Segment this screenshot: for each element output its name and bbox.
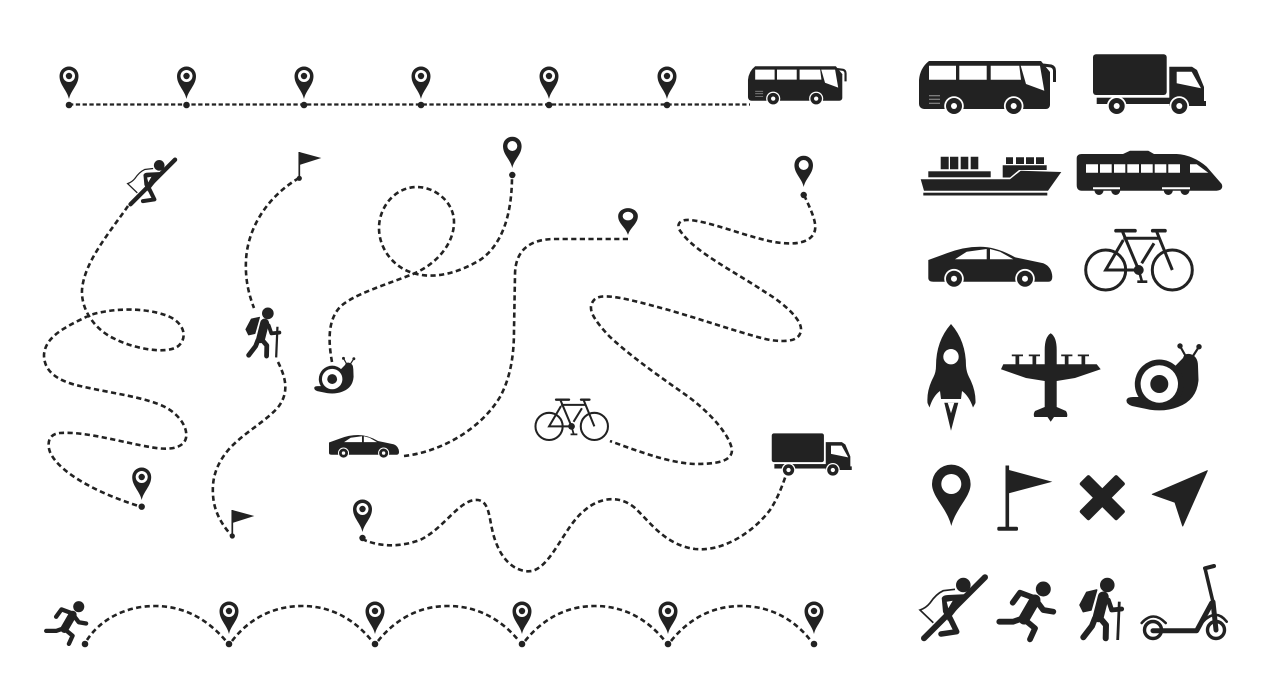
icon: snail xyxy=(1126,343,1202,410)
icon: flag xyxy=(997,466,1052,531)
route: bottom arcs with runner and pins xyxy=(46,601,824,647)
location pins xyxy=(60,66,676,99)
icon: hiker xyxy=(1080,578,1122,640)
icon: car xyxy=(928,247,1052,289)
icon: small bicycle xyxy=(535,400,608,440)
icon: small bus xyxy=(748,66,846,106)
icon: cargo ship xyxy=(921,157,1061,196)
icon: bicycle xyxy=(1086,231,1192,290)
stop markers xyxy=(66,102,670,108)
icon: truck xyxy=(1093,54,1206,116)
icon: top flag xyxy=(297,152,321,181)
icon: kick scooter xyxy=(1142,566,1227,638)
icon: small hiker xyxy=(246,308,279,357)
icon: loop end pin xyxy=(503,137,522,178)
route: superhero winding path to pin xyxy=(44,160,186,510)
icon: small snail xyxy=(314,357,355,393)
route: car to pin xyxy=(329,208,638,459)
location pins xyxy=(220,602,824,634)
icon: end pin xyxy=(132,468,151,510)
icon: train xyxy=(1077,151,1222,195)
icon: small runner xyxy=(46,601,86,644)
route: top straight line with pins and bus xyxy=(60,66,846,108)
route: pin to truck wavy path xyxy=(353,433,852,571)
stop markers xyxy=(82,641,817,647)
icon: wavy route pin xyxy=(353,500,372,541)
icon: superhero xyxy=(920,577,985,638)
icon: small car xyxy=(329,435,399,459)
icon: runner xyxy=(999,582,1053,639)
icon: small truck xyxy=(772,433,852,477)
icon: airplane xyxy=(1001,333,1101,422)
route: flag to hiker to flag xyxy=(213,152,321,539)
route: snail loop to pin xyxy=(314,137,522,393)
icon: small superhero xyxy=(128,160,175,204)
icon: location pin xyxy=(932,465,971,526)
route: bicycle winding path to pin xyxy=(535,156,815,464)
icon: navigation arrow xyxy=(1152,471,1207,526)
icon: rocket xyxy=(927,324,976,431)
icon: bicycle route pin xyxy=(794,156,813,198)
icon: car route pin xyxy=(618,208,638,235)
icon: bottom flag xyxy=(230,510,254,539)
icon: cross mark xyxy=(1079,474,1126,521)
icon: bus xyxy=(919,61,1054,116)
